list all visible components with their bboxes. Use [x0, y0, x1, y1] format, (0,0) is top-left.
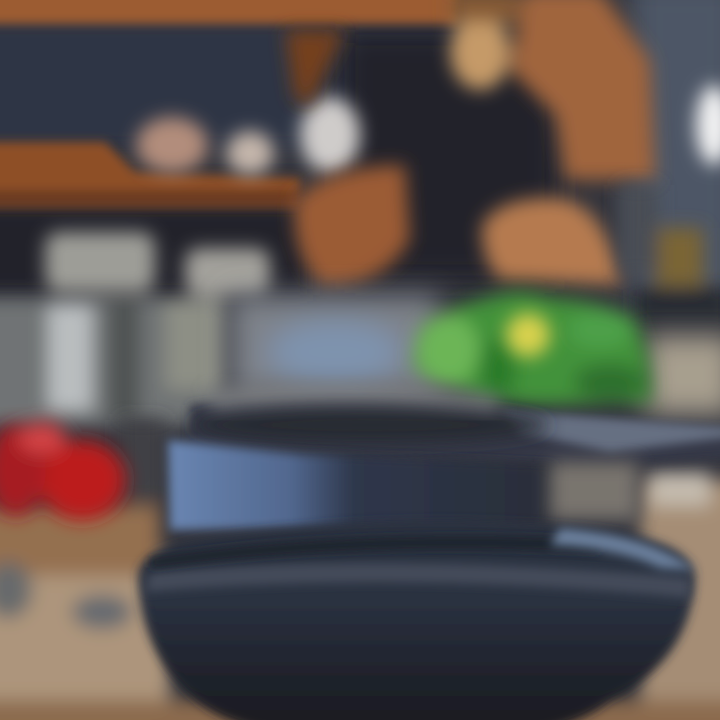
counter behind pans	[230, 295, 720, 415]
yellow centre of salad	[506, 313, 550, 357]
red tomatoes	[0, 422, 126, 520]
bottle and jars at right	[620, 85, 720, 324]
top wooden shelf	[0, 0, 460, 24]
pan handle and gap	[550, 462, 638, 520]
shelf bowls and cups	[136, 97, 360, 175]
glass jars at left	[0, 232, 270, 426]
middle wooden shelf	[0, 142, 300, 208]
hanging wooden utensils	[285, 0, 655, 285]
green salad leaves	[412, 292, 651, 405]
middle pan rim	[190, 385, 720, 466]
table surface	[0, 420, 720, 720]
large front pan	[138, 521, 695, 720]
middle blue pan body	[168, 440, 555, 530]
